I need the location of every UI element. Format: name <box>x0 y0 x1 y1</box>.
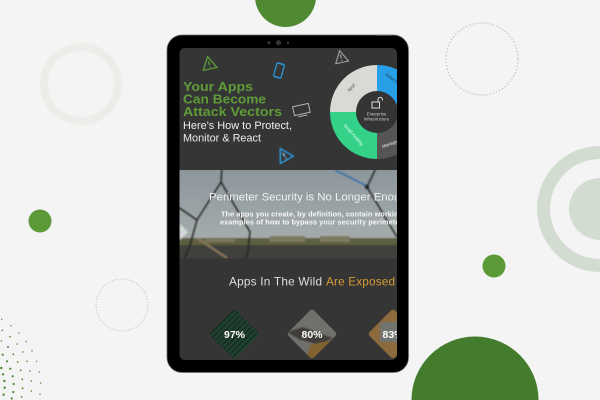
title: Your Apps <box>183 79 253 94</box>
section body text: examples of how to bypass your security perimeter. <box>220 218 404 226</box>
icon: monitor <box>293 103 311 118</box>
donut centre label <box>364 112 389 120</box>
title: Attack Vectors <box>183 104 282 119</box>
icon: open lock <box>372 97 382 108</box>
donut centre label: Enterprise <box>367 112 387 116</box>
donut segment label: grey: Managed <box>381 138 401 149</box>
tablet screen <box>180 48 397 360</box>
section heading: apps in the wild: Are Exposed <box>326 275 395 289</box>
photo band: chain-link fence <box>180 170 397 258</box>
section heading: perimeter security: Perimeter Security is No Longer Enough <box>209 192 413 204</box>
decorative circle: bottom green <box>412 336 538 400</box>
donut chart: enterprise infrastructure <box>330 65 397 159</box>
title <box>183 82 282 116</box>
section heading: apps in the wild: Apps In The Wild <box>229 275 322 289</box>
icon: grey warning triangle <box>333 49 349 64</box>
icon: green warning triangle <box>201 55 217 70</box>
decorative dot field: bottom left <box>0 319 41 400</box>
stat diamond: 83% <box>368 310 397 358</box>
stat diamond: 97% <box>210 310 258 358</box>
icon: blue warning triangle <box>278 147 294 165</box>
donut centre label: Infrastructure <box>364 116 390 122</box>
decorative circle: right small green <box>482 254 506 278</box>
icon: blue phone <box>273 63 285 78</box>
donut segment label: green: Small Hosting <box>342 123 365 147</box>
stat diamond: 97%: 97% <box>224 329 246 341</box>
decorative circle: top green <box>255 0 316 27</box>
decorative ring: upper left <box>44 47 118 121</box>
stat diamond: 80%: 80% <box>301 329 323 341</box>
decorative dotted circle: lower left <box>96 279 148 331</box>
decorative dotted circle: upper right <box>446 23 518 95</box>
subtitle: Monitor & React <box>183 132 261 144</box>
section body text: The apps you create, by definition, contain working <box>221 210 403 219</box>
section body text <box>220 211 397 226</box>
donut segment label: blue: Network <box>384 72 401 86</box>
subtitle: Here's How to Protect, <box>183 120 292 132</box>
donut segment label: WAF: WAF <box>346 82 357 93</box>
stat diamond: 80% <box>288 310 336 358</box>
tablet body <box>167 35 408 372</box>
section heading: apps in the wild <box>229 277 394 288</box>
decorative circle: left small green <box>28 210 52 232</box>
tablet camera <box>268 40 289 45</box>
stat diamond: 83%: 83% <box>382 329 404 341</box>
decorative rings: right edge <box>537 146 600 272</box>
title: Can Become <box>183 92 266 106</box>
subtitle <box>184 122 292 142</box>
